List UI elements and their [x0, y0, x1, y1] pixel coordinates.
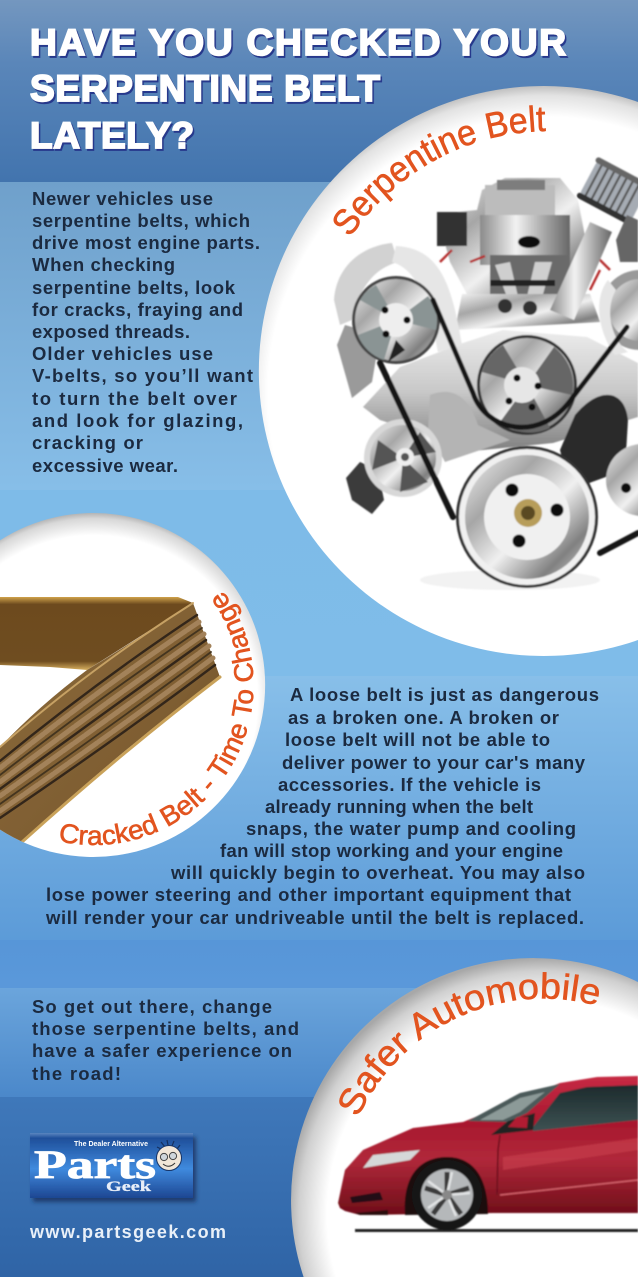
- logo wordmark: Parts: [34, 1142, 156, 1187]
- front wheel: [405, 1157, 488, 1230]
- logo subword: Geek: [106, 1179, 152, 1195]
- text block: loose belt: will render your car undriveable until the belt is replaced.: [45, 907, 584, 928]
- illustration: cracked ribbed belt: [0, 597, 220, 842]
- text block: loose belt: [45, 684, 599, 928]
- pulley upper right: [610, 269, 638, 351]
- text block: newer vehicles: serpentine belts, which: [32, 210, 250, 231]
- title: SERPENTINE BELT: [30, 68, 380, 109]
- text block: newer vehicles: excessive wear.: [32, 455, 178, 476]
- title: HAVE YOU CHECKED YOUR: [30, 22, 566, 63]
- illustration: chrome engine: [334, 156, 638, 590]
- text block: newer vehicles: Newer vehicles use: [32, 188, 213, 209]
- air filter and tube: [550, 222, 612, 320]
- illustration: red car: [338, 1076, 638, 1232]
- text block: closing advice: [32, 996, 299, 1084]
- text block: newer vehicles: [32, 188, 260, 476]
- text block: newer vehicles: to turn the belt over: [32, 388, 237, 409]
- text block: newer vehicles: for cracks, fraying and: [32, 299, 243, 320]
- text block: loose belt: fan will stop working and your engine: [220, 840, 563, 861]
- panel: safer automobile circle: [291, 958, 638, 1277]
- text block: loose belt: as a broken one. A broken or: [288, 707, 559, 728]
- text block: loose belt: already running when the belt: [265, 796, 533, 817]
- icon: geek face: [156, 1140, 182, 1170]
- title: LATELY?: [30, 115, 194, 156]
- lower dark bracket: [428, 392, 510, 462]
- text block: loose belt: snaps, the water pump and cooling: [246, 818, 576, 839]
- text block: newer vehicles: Older vehicles use: [32, 343, 213, 364]
- text block: closing advice: have a safer experience on: [32, 1040, 292, 1061]
- text block: newer vehicles: When checking: [32, 254, 175, 275]
- text block: loose belt: deliver power to your car's many: [282, 752, 586, 773]
- upper-left bracket and hose: [334, 243, 398, 325]
- text block: closing advice: the road!: [32, 1063, 121, 1084]
- logo: Parts Geek: [30, 1133, 193, 1198]
- text block: newer vehicles: exposed threads.: [32, 321, 190, 342]
- bracket plate: [363, 330, 638, 453]
- text block: loose belt: will quickly begin to overheat. You may also: [170, 862, 585, 883]
- panel: cracked belt circle: [0, 513, 266, 857]
- text block: closing advice: those serpentine belts, and: [32, 1018, 299, 1039]
- curved label: Safer Automobile: Safer Automobile: [339, 972, 599, 1114]
- text block: newer vehicles: cracking or: [32, 432, 143, 453]
- text block: loose belt: accessories. If the vehicle is: [278, 774, 541, 795]
- crank pulley: [456, 446, 598, 588]
- text block: newer vehicles: V-belts, so you’ll want: [32, 365, 253, 386]
- title: [30, 22, 566, 156]
- text block: closing advice: So get out there, change: [32, 996, 272, 1017]
- pulley lower left: [346, 462, 384, 514]
- drive belt: [380, 300, 638, 553]
- curved label: Serpentine Belt: Serpentine Belt: [334, 105, 546, 234]
- website url: www.partsgeek.com: [29, 1222, 226, 1242]
- text block: loose belt: lose power steering and other important equipment that: [46, 884, 571, 905]
- logo tagline: The Dealer Alternative: [74, 1141, 148, 1148]
- pulley upper left: [352, 276, 440, 364]
- panel: serpentine belt circle: [258, 86, 638, 656]
- carburettor: [437, 178, 590, 300]
- text block: loose belt: loose belt will not be able to: [285, 729, 550, 750]
- pulley lower right: [606, 444, 638, 516]
- curved label: Cracked Belt - Time To Change: Cracked Belt - Time To Change: [60, 592, 254, 846]
- pulley centre: [477, 335, 577, 435]
- text block: newer vehicles: drive most engine parts.: [32, 232, 260, 253]
- text block: loose belt: A loose belt is just as dangerous: [290, 684, 599, 705]
- text block: newer vehicles: serpentine belts, look: [32, 277, 236, 298]
- text block: newer vehicles: and look for glazing,: [32, 410, 243, 431]
